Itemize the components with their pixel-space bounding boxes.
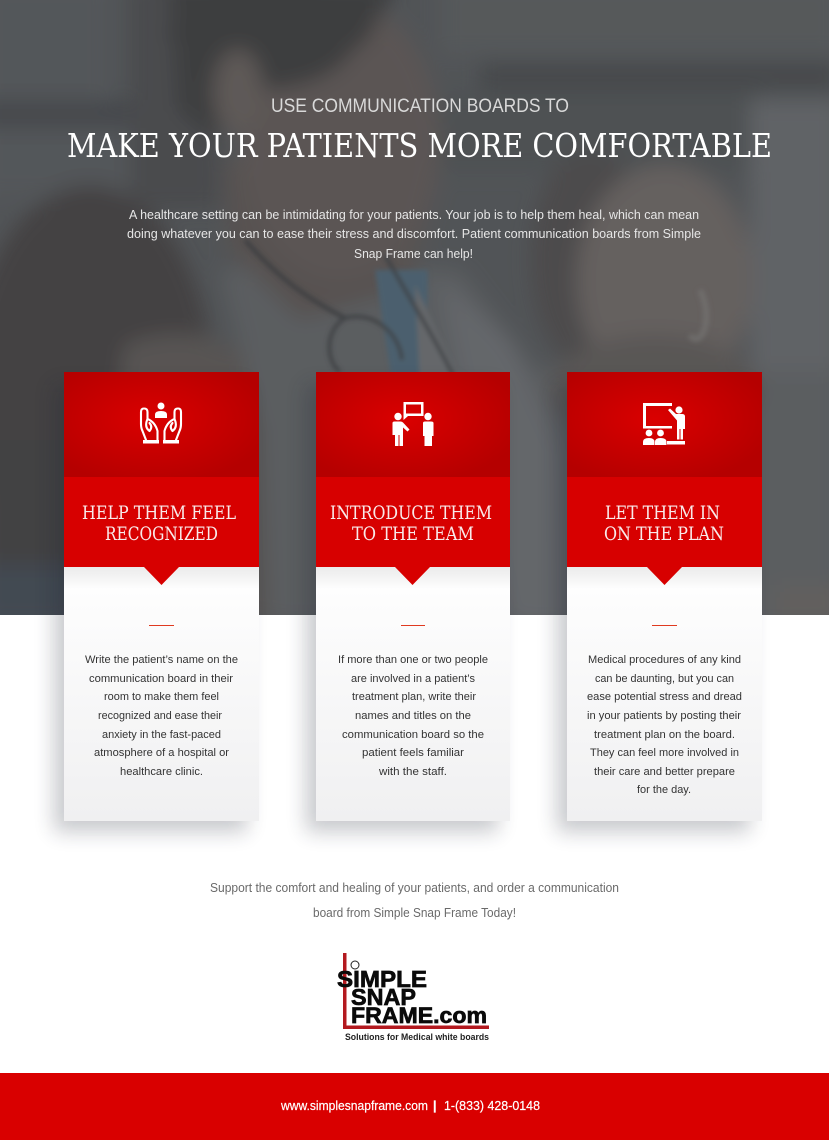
panel: help them feel recognized xyxy=(54,372,259,832)
footer contact text: 1-(833) 428-0148 xyxy=(444,1099,540,1113)
closing call to action: Support the comfort and healing of your patients, and order a communication xyxy=(210,881,619,895)
card text: ease potential stress and dread xyxy=(587,691,742,703)
card text xyxy=(85,654,238,778)
card text: for the day. xyxy=(637,784,691,796)
card heading: HELP THEM FEEL xyxy=(82,503,236,524)
card text: treatment plan on the board. xyxy=(594,729,735,741)
card text: They can feel more involved in xyxy=(590,747,739,759)
card text: atmosphere of a hospital or xyxy=(94,747,229,759)
closing call to action xyxy=(210,881,619,920)
footer bar xyxy=(0,1073,829,1140)
intro text: A healthcare setting can be intimidating for your patients. Your job is to help them heal, which can mean xyxy=(129,208,699,222)
heading: eyebrow: USE COMMUNICATION BOARDS TO xyxy=(271,95,569,117)
logo: Simple Snap Frame xyxy=(337,953,489,1042)
icon: two people with speech bubble xyxy=(392,402,434,446)
card heading: TO THE TEAM xyxy=(352,524,474,545)
card text xyxy=(338,654,488,778)
card text: recognized and ease their xyxy=(98,710,222,722)
panel: let them in on the plan xyxy=(557,372,762,832)
icon: presenter at board with audience xyxy=(643,403,685,445)
card text: names and titles on the xyxy=(355,710,471,722)
card text: are involved in a patient’s xyxy=(351,673,475,685)
card text: their care and better prepare xyxy=(594,766,735,778)
card text: communication board so the xyxy=(342,729,484,741)
card text: room to make them feel xyxy=(104,691,219,703)
card heading: INTRODUCE THEM xyxy=(330,503,492,524)
card text xyxy=(587,654,742,796)
logo: Simple Snap Frame: Solutions for Medical white boards xyxy=(345,1032,489,1042)
card text: anxiety in the fast-paced xyxy=(102,729,221,741)
card text: communication board in their xyxy=(89,673,233,685)
card text: with the staff. xyxy=(378,766,447,778)
background photo: doctor with patient xyxy=(0,0,829,630)
card text: treatment plan, write their xyxy=(352,691,476,703)
card text: If more than one or two people xyxy=(338,654,488,666)
logo: Simple Snap Frame: SIMPLE xyxy=(337,966,427,992)
card heading xyxy=(330,503,492,545)
card heading: RECOGNIZED xyxy=(105,524,218,545)
card text: Write the patient’s name on the xyxy=(85,654,238,666)
footer contact text xyxy=(280,1099,540,1113)
card text: Medical procedures of any kind xyxy=(588,654,741,666)
intro text: Snap Frame can help! xyxy=(354,247,473,261)
card text: patient feels familiar xyxy=(362,747,464,759)
card text: can be daunting, but you can xyxy=(595,673,734,685)
card heading: LET THEM IN xyxy=(605,503,720,524)
footer contact text: www.simplesnapframe.com xyxy=(280,1099,428,1113)
card heading xyxy=(604,503,724,545)
card text: in your patients by posting their xyxy=(587,710,741,722)
intro text xyxy=(127,208,701,261)
card heading: ON THE PLAN xyxy=(604,524,724,545)
card text: healthcare clinic. xyxy=(120,766,203,778)
logo: Simple Snap Frame: FRAME.com xyxy=(351,1003,487,1028)
logo: Simple Snap Frame: SNAP xyxy=(351,984,416,1010)
panel: introduce them to the team xyxy=(306,372,510,832)
card heading xyxy=(82,503,236,545)
closing call to action: board from Simple Snap Frame Today! xyxy=(313,906,516,920)
footer contact text: | xyxy=(433,1099,436,1113)
intro text: doing whatever you can to ease their stress and discomfort. Patient communication boards from Simple xyxy=(127,227,701,241)
icon: hands holding person xyxy=(141,402,181,444)
